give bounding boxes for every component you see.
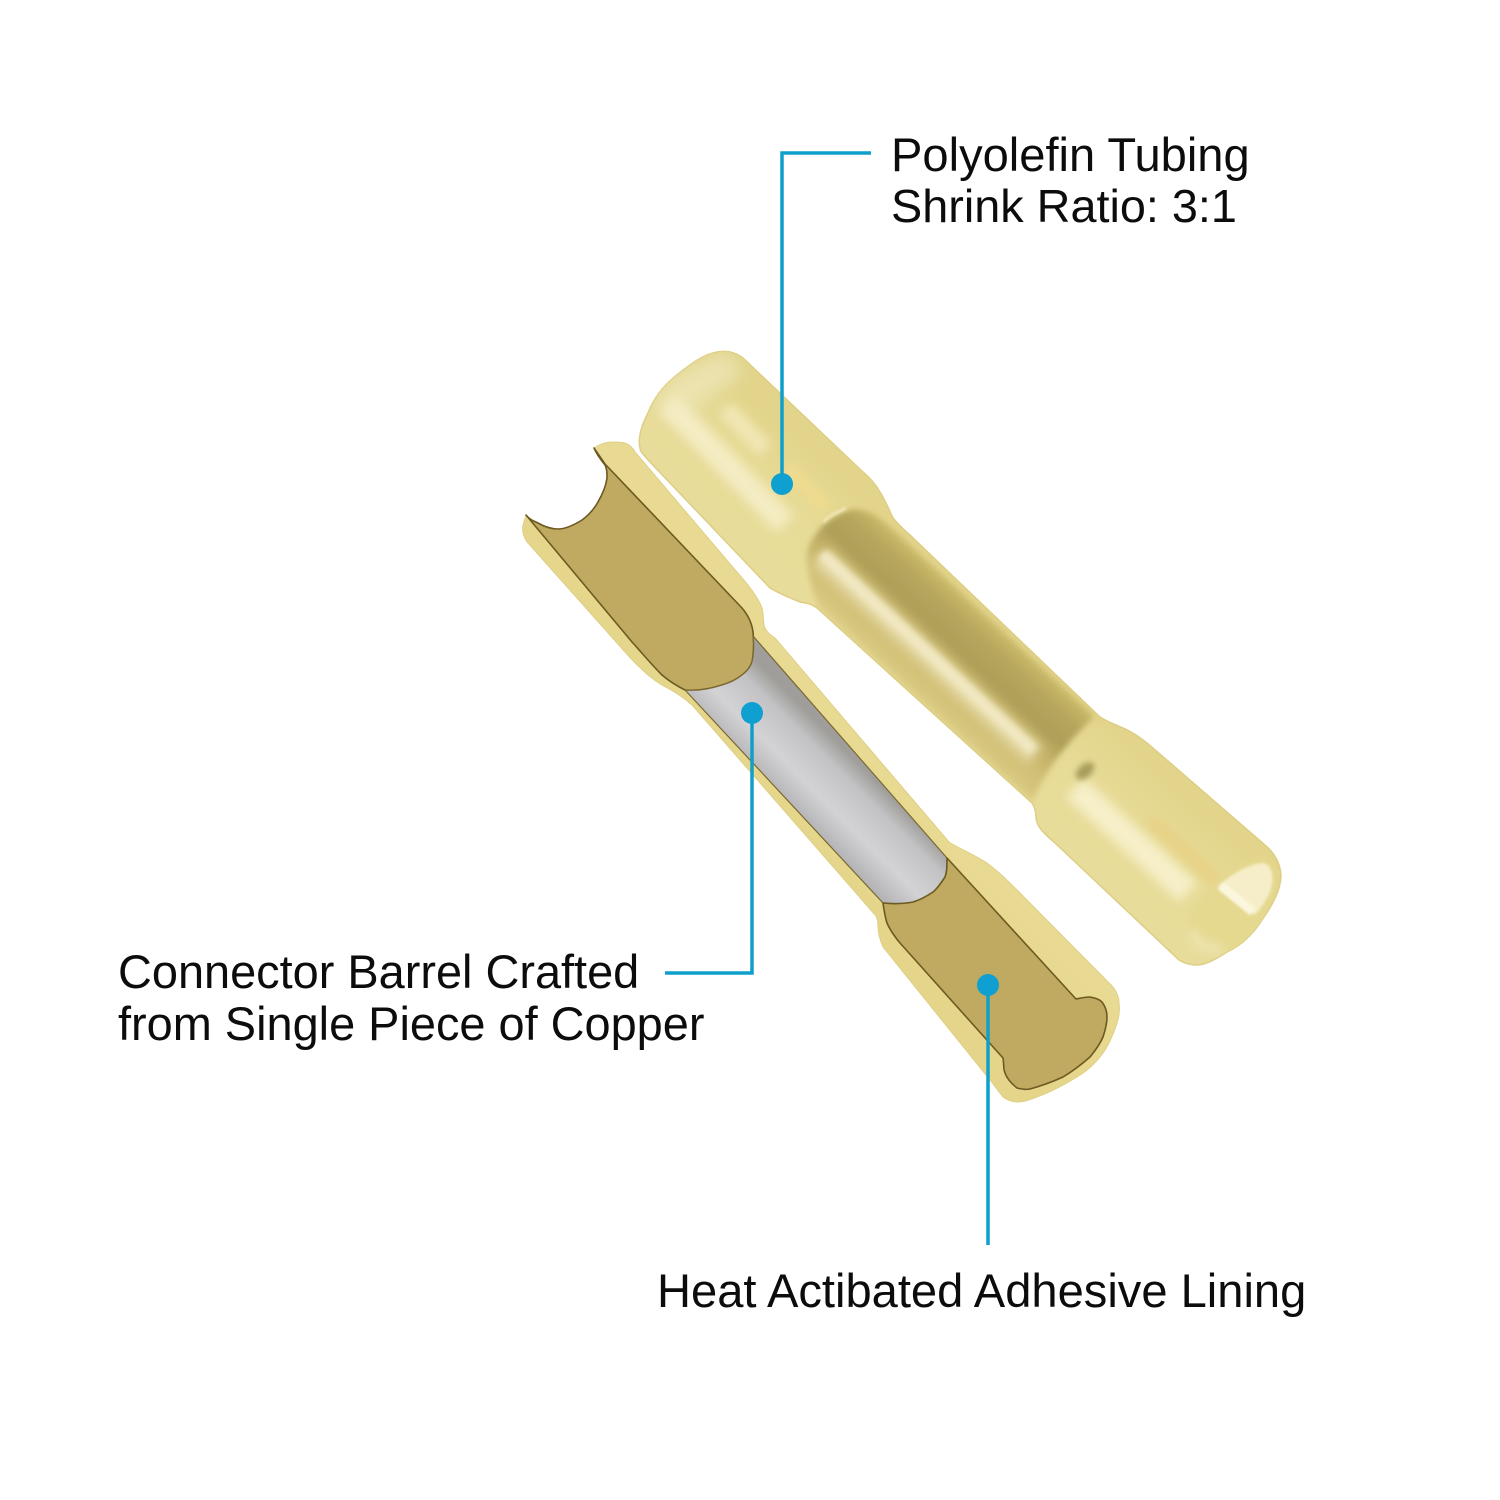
ring lower pale glow	[1192, 930, 1222, 949]
tube body outline	[639, 351, 1281, 965]
callout: polyolefin tubing	[771, 128, 1250, 495]
centre barrel section	[807, 509, 1095, 803]
crease at barrel shoulder	[823, 508, 846, 522]
highlight core	[822, 554, 1033, 750]
far end inner ring	[1191, 897, 1247, 949]
label text: Shrink Ratio: 3:1	[891, 180, 1237, 232]
leader line	[986, 985, 990, 1245]
marker dot	[771, 473, 793, 495]
callout: adhesive lining	[657, 974, 1306, 1317]
dimple at neck	[1072, 759, 1098, 783]
lower adhesive lining	[883, 858, 1107, 1089]
leader line	[665, 713, 752, 973]
label text: Polyolefin Tubing	[891, 128, 1250, 181]
far end amber streak	[1150, 820, 1218, 882]
glossy highlight on barrel	[820, 556, 1035, 755]
opening highlight	[1221, 886, 1253, 912]
amber streak at shoulder	[790, 470, 824, 504]
tube surface shading	[652, 352, 1277, 954]
upper adhesive lining	[526, 448, 754, 690]
label text: from Single Piece of Copper	[118, 998, 704, 1050]
near end long highlight	[668, 404, 785, 524]
label text: Heat Actibated Adhesive Lining	[657, 1264, 1306, 1317]
infographic: heat shrink butt connector diagram	[118, 136, 1304, 1317]
outer yellow shell	[523, 442, 1119, 1102]
far end highlight	[1075, 788, 1188, 892]
pale rim at near end	[652, 352, 744, 410]
marker dot	[741, 702, 763, 724]
tube opening	[1217, 863, 1272, 915]
label text: Connector Barrel Crafted	[118, 946, 639, 998]
leader line	[782, 153, 871, 484]
marker dot	[977, 974, 999, 996]
right connector: intact polyolefin tube	[639, 351, 1281, 965]
exposed copper barrel	[685, 636, 947, 904]
near end upper highlight	[725, 408, 765, 450]
left connector: cutaway section	[523, 442, 1119, 1102]
callout: connector barrel	[118, 702, 763, 1050]
